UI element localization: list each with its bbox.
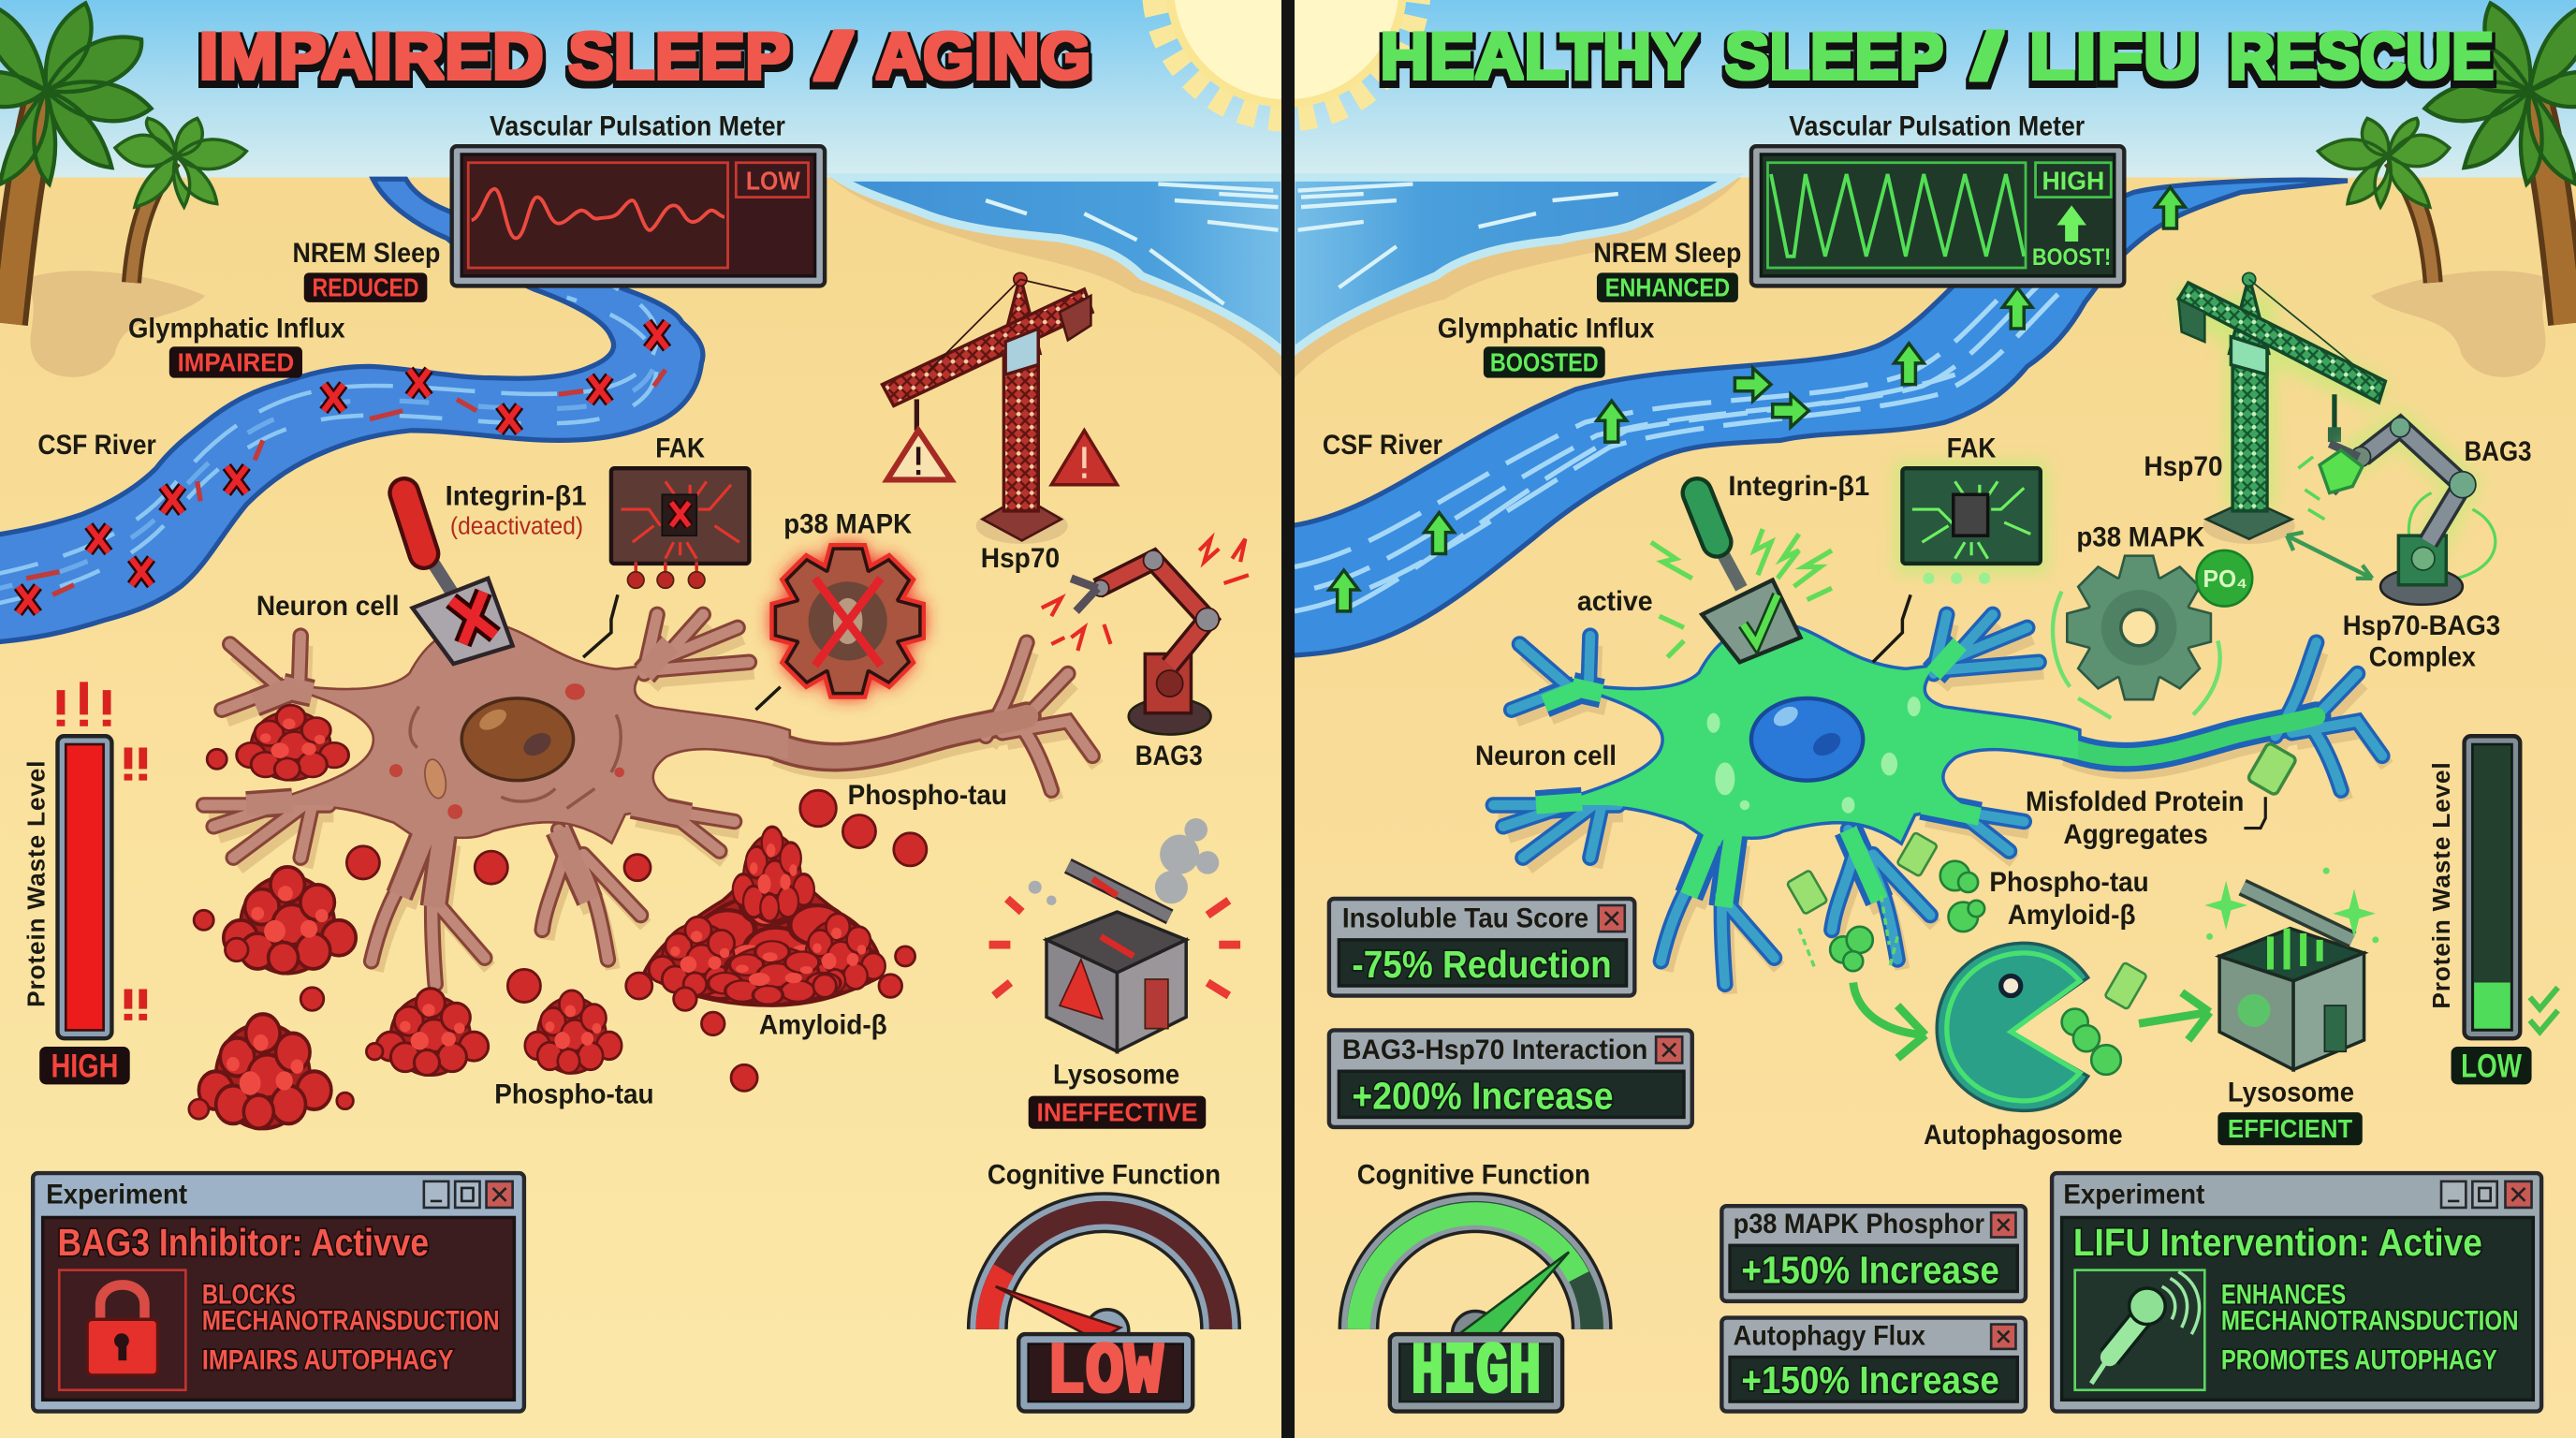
experiment window: BAG3 inhibitor: MECHANOTRANSDUCTION: [202, 1306, 500, 1337]
vascular pulsation meter: Vascular Pulsation Meter: [1789, 111, 2086, 142]
experiment window: BAG3 inhibitor: BLOCKS: [202, 1279, 296, 1310]
center divider: [1281, 0, 1295, 1438]
experiment window: LIFU intervention: PROMOTES AUTOPHAGY: [2221, 1345, 2497, 1376]
river blockage markers: [18, 322, 667, 613]
vascular pulsation meter: BOOST!: [2032, 245, 2111, 271]
title: HEALTHY: [1380, 19, 1697, 93]
misfolded protein aggregates label: Aggregates: [2063, 819, 2208, 850]
p38 MAPK gear: phosphorylated: [2053, 521, 2252, 718]
BAG3 robotic arm: [1042, 539, 1249, 771]
title: IMPAIRED: [198, 19, 544, 93]
experiment window: BAG3 inhibitor: IMPAIRS AUTOPHAGY: [202, 1345, 454, 1376]
cleared protein fragments: Phospho-tau: [1989, 867, 2149, 898]
cognitive function gauge: high: HIGH: [1412, 1333, 1541, 1415]
p38 MAPK gear: phosphorylated: p38 MAPK: [2076, 521, 2205, 552]
protein waste gauge: low: LOW: [2461, 1049, 2523, 1085]
experiment window: LIFU intervention: Experiment: [2063, 1179, 2204, 1210]
protein aggregates: [189, 705, 927, 1128]
vascular pulsation meter: [1751, 111, 2124, 286]
Integrin lever: active: Integrin-β1: [1728, 471, 1869, 502]
Hsp70 crane: Hsp70: [981, 543, 1060, 574]
stat: p38 MAPK phosphor: +150% Increase: [1741, 1249, 1999, 1292]
FAK chip: [611, 433, 749, 588]
experiment window: LIFU intervention: ENHANCES: [2221, 1279, 2346, 1310]
cognitive function gauge: high: Cognitive Function: [1357, 1159, 1590, 1190]
protein waste gauge: high: [22, 682, 143, 1085]
Integrin lever: deactivated: (deactivated): [450, 512, 583, 540]
label: neuron cell: Neuron cell: [256, 591, 400, 622]
lead lines: [583, 594, 781, 710]
label: CSF river: CSF River: [1323, 430, 1442, 461]
scenery: ocean: [829, 178, 1284, 381]
cleared protein fragments: Amyloid-β: [2008, 900, 2136, 931]
misfolded protein aggregates label: Misfolded Protein: [2026, 786, 2244, 817]
lysosome: ineffective: Lysosome: [1053, 1059, 1179, 1090]
cognitive function gauge: low: LOW: [1046, 1333, 1164, 1415]
BAG3 robotic arm with complex: Complex: [2369, 642, 2476, 673]
lysosome: ineffective: INEFFECTIVE: [1036, 1098, 1197, 1127]
protein waste gauge: low: [2427, 736, 2558, 1085]
stat: BAG3-Hsp70 interaction: BAG3-Hsp70 Interaction: [1342, 1034, 1647, 1065]
label: glymphatic influx: Glymphatic Influx: [1438, 314, 1655, 345]
label: NREM sleep: ENHANCED: [1605, 273, 1730, 302]
label: NREM sleep: [292, 238, 440, 302]
flow arrows: [1329, 187, 2185, 611]
FAK chip: FAK: [1947, 433, 1997, 464]
experiment window: BAG3 inhibitor: [33, 1173, 524, 1412]
Neuron cell: impaired: [204, 614, 1097, 994]
BAG3 robotic arm with complex: BAG3: [2465, 436, 2532, 467]
stat: autophagy flux: +150% Increase: [1741, 1358, 1999, 1401]
Hsp70 crane: Hsp70: [2144, 451, 2223, 482]
misfolded protein aggregates label: [2026, 742, 2297, 850]
cognitive function gauge: low: Cognitive Function: [988, 1159, 1221, 1190]
CSF river: [1292, 180, 2348, 655]
panel: impaired sleep / aging: [0, 4, 1284, 1415]
vascular pulsation meter: LOW: [746, 167, 800, 196]
aggregate labels: Phospho-tau: [494, 1078, 654, 1109]
lysosome: ineffective: [989, 818, 1240, 1129]
cognitive function gauge: low: [988, 1159, 1221, 1415]
Integrin lever: deactivated: Integrin-β1: [446, 481, 587, 512]
protein waste gauge: low: Protein Waste Level: [2427, 762, 2455, 1009]
title: /: [813, 19, 855, 93]
stat: BAG3-Hsp70 interaction: +200% Increase: [1352, 1075, 1613, 1118]
icon: padlock: [59, 1270, 185, 1390]
lysosome: efficient: Lysosome: [2228, 1078, 2354, 1108]
BAG3 robotic arm with complex: Hsp70-BAG3: [2343, 610, 2500, 641]
Hsp70 crane: [2144, 272, 2391, 544]
CSF river: [0, 179, 703, 642]
label: NREM sleep: NREM Sleep: [1593, 238, 1741, 269]
stat: insoluble tau score: -75% Reduction: [1352, 943, 1612, 986]
label: CSF river: CSF River: [37, 430, 156, 461]
stat: insoluble tau score: [1329, 899, 1634, 996]
autophagosome: Autophagosome: [1924, 1120, 2123, 1151]
label: NREM sleep: [1593, 238, 1741, 302]
vascular pulsation meter: [452, 111, 825, 286]
label: neuron cell: Neuron cell: [1475, 741, 1617, 771]
stat: BAG3-Hsp70 interaction: [1329, 1030, 1692, 1127]
cognitive function gauge: high: [1357, 1159, 1592, 1415]
autophagosome: [1853, 943, 2210, 1151]
title: LIFU: [2029, 19, 2198, 93]
label: glymphatic influx: Glymphatic Influx: [128, 314, 345, 345]
scenery: ocean: [1292, 178, 1741, 381]
p38 MAPK gear: inhibited: p38 MAPK: [783, 508, 913, 539]
protein waste gauge: high: Protein Waste Level: [22, 761, 51, 1007]
label: glymphatic influx: [1438, 314, 1655, 378]
icon: ultrasound probe: [2075, 1270, 2204, 1390]
aggregate labels: Phospho-tau: [848, 780, 1007, 811]
experiment window: LIFU intervention: LIFU Intervention: Active: [2073, 1221, 2482, 1264]
vascular pulsation meter: HIGH: [2042, 167, 2104, 196]
vascular pulsation meter: Vascular Pulsation Meter: [490, 111, 785, 142]
Integrin lever: active: [1651, 471, 1869, 662]
lysosome: efficient: EFFICIENT: [2228, 1114, 2352, 1143]
stat: p38 MAPK phosphor: [1721, 1206, 2026, 1301]
stat: p38 MAPK phosphor: p38 MAPK Phosphor: [1734, 1209, 1984, 1240]
experiment window: BAG3 inhibitor: BAG3 Inhibitor: Activve: [57, 1221, 429, 1264]
label: NREM sleep: REDUCED: [313, 273, 419, 302]
title: SLEEP: [568, 19, 790, 93]
label: NREM sleep: NREM Sleep: [292, 238, 440, 269]
label: active: active: [1577, 586, 1653, 617]
stat: insoluble tau score: Insoluble Tau Score: [1342, 903, 1588, 934]
title: [1380, 19, 2494, 93]
title: RESCUE: [2230, 19, 2494, 93]
palm trees: [2318, 4, 2576, 377]
protein waste gauge: high: HIGH: [51, 1049, 118, 1085]
BAG3 robotic arm with complex: [2287, 418, 2532, 673]
title: SLEEP: [1725, 19, 1943, 93]
panel: healthy sleep / LIFU rescue: [1292, 4, 2576, 1415]
lead line: [1873, 594, 1910, 662]
p38 MAPK gear: inhibited: [777, 508, 918, 692]
title: [198, 19, 1090, 93]
stat: autophagy flux: Autophagy Flux: [1734, 1320, 1925, 1351]
aggregate labels: Amyloid-β: [759, 1010, 887, 1041]
Neuron cell: healthy: [1493, 614, 2387, 994]
title: AGING: [875, 19, 1090, 93]
sun: [1155, 0, 1418, 118]
p38 MAPK gear: phosphorylated: PO₄: [2203, 565, 2247, 593]
Hsp70 crane: [883, 272, 1117, 574]
lysosome: efficient: [2204, 868, 2378, 1145]
label: glymphatic influx: [128, 314, 345, 378]
experiment window: BAG3 inhibitor: Experiment: [46, 1179, 187, 1210]
FAK chip: [1895, 433, 2047, 584]
cleared protein fragments: [1787, 832, 2149, 1009]
label: glymphatic influx: IMPAIRED: [178, 347, 294, 376]
aggregate labels: [494, 780, 1007, 1109]
FAK chip: FAK: [655, 433, 705, 464]
BAG3 robotic arm: BAG3: [1135, 741, 1203, 771]
palm trees: [0, 4, 246, 377]
title: /: [1969, 19, 2004, 93]
stat: autophagy flux: [1721, 1318, 2026, 1412]
label: glymphatic influx: BOOSTED: [1490, 347, 1599, 376]
Integrin lever: deactivated: [404, 481, 587, 664]
experiment window: LIFU intervention: [2052, 1173, 2541, 1412]
